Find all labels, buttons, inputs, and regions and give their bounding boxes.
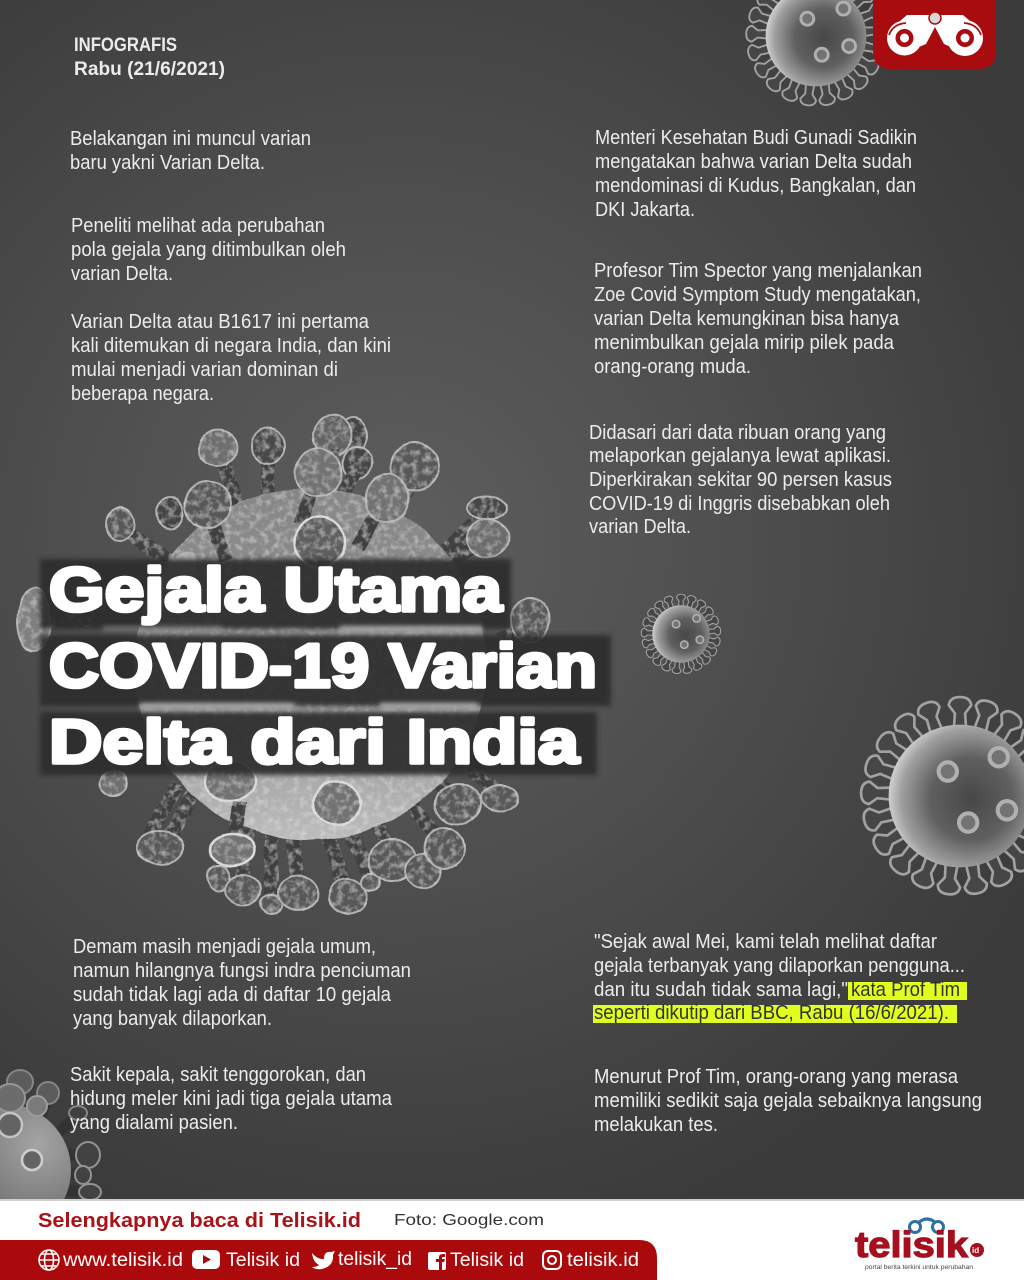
virus: large right: [861, 697, 1024, 896]
text block: peneliti: [71, 214, 346, 285]
text block: peneliti: Peneliti melihat ada perubahan: [71, 214, 325, 237]
text block: sakit kepala: Sakit kepala, sakit tenggorokan, dan: [70, 1063, 366, 1086]
text block: data ribuan orang: [589, 421, 892, 538]
social media bar: telisik.id: [567, 1249, 639, 1271]
social media bar: Telisik id: [450, 1249, 524, 1271]
text block: quote with highlight: gejala terbanyak yang dilaporkan pengguna...: [594, 954, 965, 977]
text block: quote with highlight: kata Prof Tim: [851, 978, 960, 1001]
text block: profesor tim spector: menimbulkan gejala mirip pilek pada: [594, 331, 895, 354]
telisik logo: portal berita terkini untuk perubahan: [865, 1264, 973, 1271]
header: label and date: [74, 34, 225, 80]
text block: menurut prof tim: [594, 1065, 982, 1136]
text block: quote with highlight: seperti dikutip dari BBC, Rabu (16/6/2021).: [594, 1001, 949, 1024]
text block: B1617: [71, 310, 391, 405]
text block: profesor tim spector: varian Delta kemungkinan bisa hanya: [594, 307, 900, 330]
icon: globe: [39, 1250, 59, 1270]
title with dark backing panels: Delta dari India: [49, 708, 580, 777]
virus: small middle: [641, 594, 721, 674]
text block: demam: Demam masih menjadi gejala umum,: [73, 935, 376, 958]
social media bar: telisik_id: [338, 1248, 412, 1270]
text block: quote with highlight: dan itu sudah tidak sama lagi,": [594, 978, 848, 1001]
text block: data ribuan orang: COVID-19 di Inggris disebabkan oleh: [589, 492, 890, 515]
text block: profesor tim spector: Zoe Covid Symptom Study mengatakan,: [594, 283, 921, 306]
icon: facebook: [428, 1252, 446, 1270]
footer call to action: Selengkapnya baca di Telisik.id: [38, 1209, 361, 1232]
text block: demam: yang banyak dilaporkan.: [73, 1007, 272, 1030]
rear spikes: [18, 415, 550, 914]
text block: data ribuan orang: varian Delta.: [589, 515, 691, 538]
title with dark backing panels: [40, 556, 611, 777]
title with dark backing panels: Gejala Utama: [49, 556, 503, 625]
text block: data ribuan orang: melaporkan gejalanya lewat aplikasi.: [589, 444, 891, 467]
title with dark backing panels: COVID-19 Varian: [49, 632, 597, 701]
text block: menteri kesehatan: Menteri Kesehatan Budi Gunadi Sadikin: [595, 126, 917, 149]
text block: profesor tim spector: orang-orang muda.: [594, 355, 751, 378]
text block: data ribuan orang: Diperkirakan sekitar 90 persen kasus: [589, 468, 892, 491]
text block: demam: sudah tidak lagi ada di daftar 10 gejala: [73, 983, 392, 1006]
text block: sakit kepala: hidung meler kini jadi tiga gejala utama: [70, 1087, 393, 1110]
text block: profesor tim spector: Profesor Tim Spector yang menjalankan: [594, 259, 922, 282]
text block: menteri kesehatan: DKI Jakarta.: [595, 198, 695, 221]
text block: peneliti: varian Delta.: [71, 262, 173, 285]
telisik logo: id: [972, 1246, 979, 1255]
text block: peneliti: pola gejala yang ditimbulkan oleh: [71, 238, 346, 261]
text block: menteri kesehatan: mendominasi di Kudus, Bangkalan, dan: [595, 174, 916, 197]
text block: profesor tim spector: [594, 259, 922, 378]
text block: demam: [73, 935, 411, 1030]
social media bar: [0, 1240, 657, 1280]
text block: B1617: mulai menjadi varian dominan di: [71, 358, 338, 381]
text block: intro varian delta: [70, 127, 311, 174]
text block: B1617: Varian Delta atau B1617 ini pertama: [71, 310, 370, 333]
text block: menurut prof tim: memiliki sedikit saja gejala sebaiknya langsung: [594, 1089, 982, 1112]
virus: bottom left: [0, 1070, 101, 1236]
text block: menurut prof tim: Menurut Prof Tim, orang-orang yang merasa: [594, 1065, 959, 1088]
text block: quote with highlight: [593, 930, 967, 1024]
text block: sakit kepala: [70, 1063, 393, 1134]
virus: top right: [746, 0, 886, 106]
telisik logo: [855, 1219, 984, 1271]
photo credit: Foto: Google.com: [394, 1212, 544, 1229]
text block: menteri kesehatan: [595, 126, 917, 221]
text block: B1617: kali ditemukan di negara India, dan kini: [71, 334, 391, 357]
text block: demam: namun hilangnya fungsi indra penciuman: [73, 959, 411, 982]
footer panel: [0, 1199, 1024, 1280]
icon: twitter: [312, 1251, 335, 1269]
header: label and date: INFOGRAFIS: [74, 34, 177, 56]
text block: quote with highlight: "Sejak awal Mei, kami telah melihat daftar: [594, 930, 937, 953]
text block: sakit kepala: yang dialami pasien.: [70, 1111, 238, 1134]
text block: intro varian delta: Belakangan ini muncul varian: [70, 127, 311, 150]
logo badge: binoculars: [873, 0, 996, 69]
virus: main central illustration: [18, 415, 550, 914]
text block: menurut prof tim: melakukan tes.: [594, 1113, 718, 1136]
header: label and date: Rabu (21/6/2021): [74, 58, 225, 80]
icon: youtube: [192, 1250, 220, 1269]
social media bar: www.telisik.id: [62, 1249, 183, 1271]
front spikes: [157, 449, 408, 866]
icon: instagram: [543, 1251, 561, 1269]
text block: data ribuan orang: Didasari dari data ribuan orang yang: [589, 421, 886, 444]
text block: B1617: beberapa negara.: [71, 382, 214, 405]
telisik logo: telisik: [855, 1224, 969, 1265]
social media bar: Telisik id: [226, 1249, 300, 1271]
virus body: [134, 488, 486, 840]
text block: intro varian delta: baru yakni Varian Delta.: [70, 151, 265, 174]
text block: menteri kesehatan: mengatakan bahwa varian Delta sudah: [595, 150, 912, 173]
